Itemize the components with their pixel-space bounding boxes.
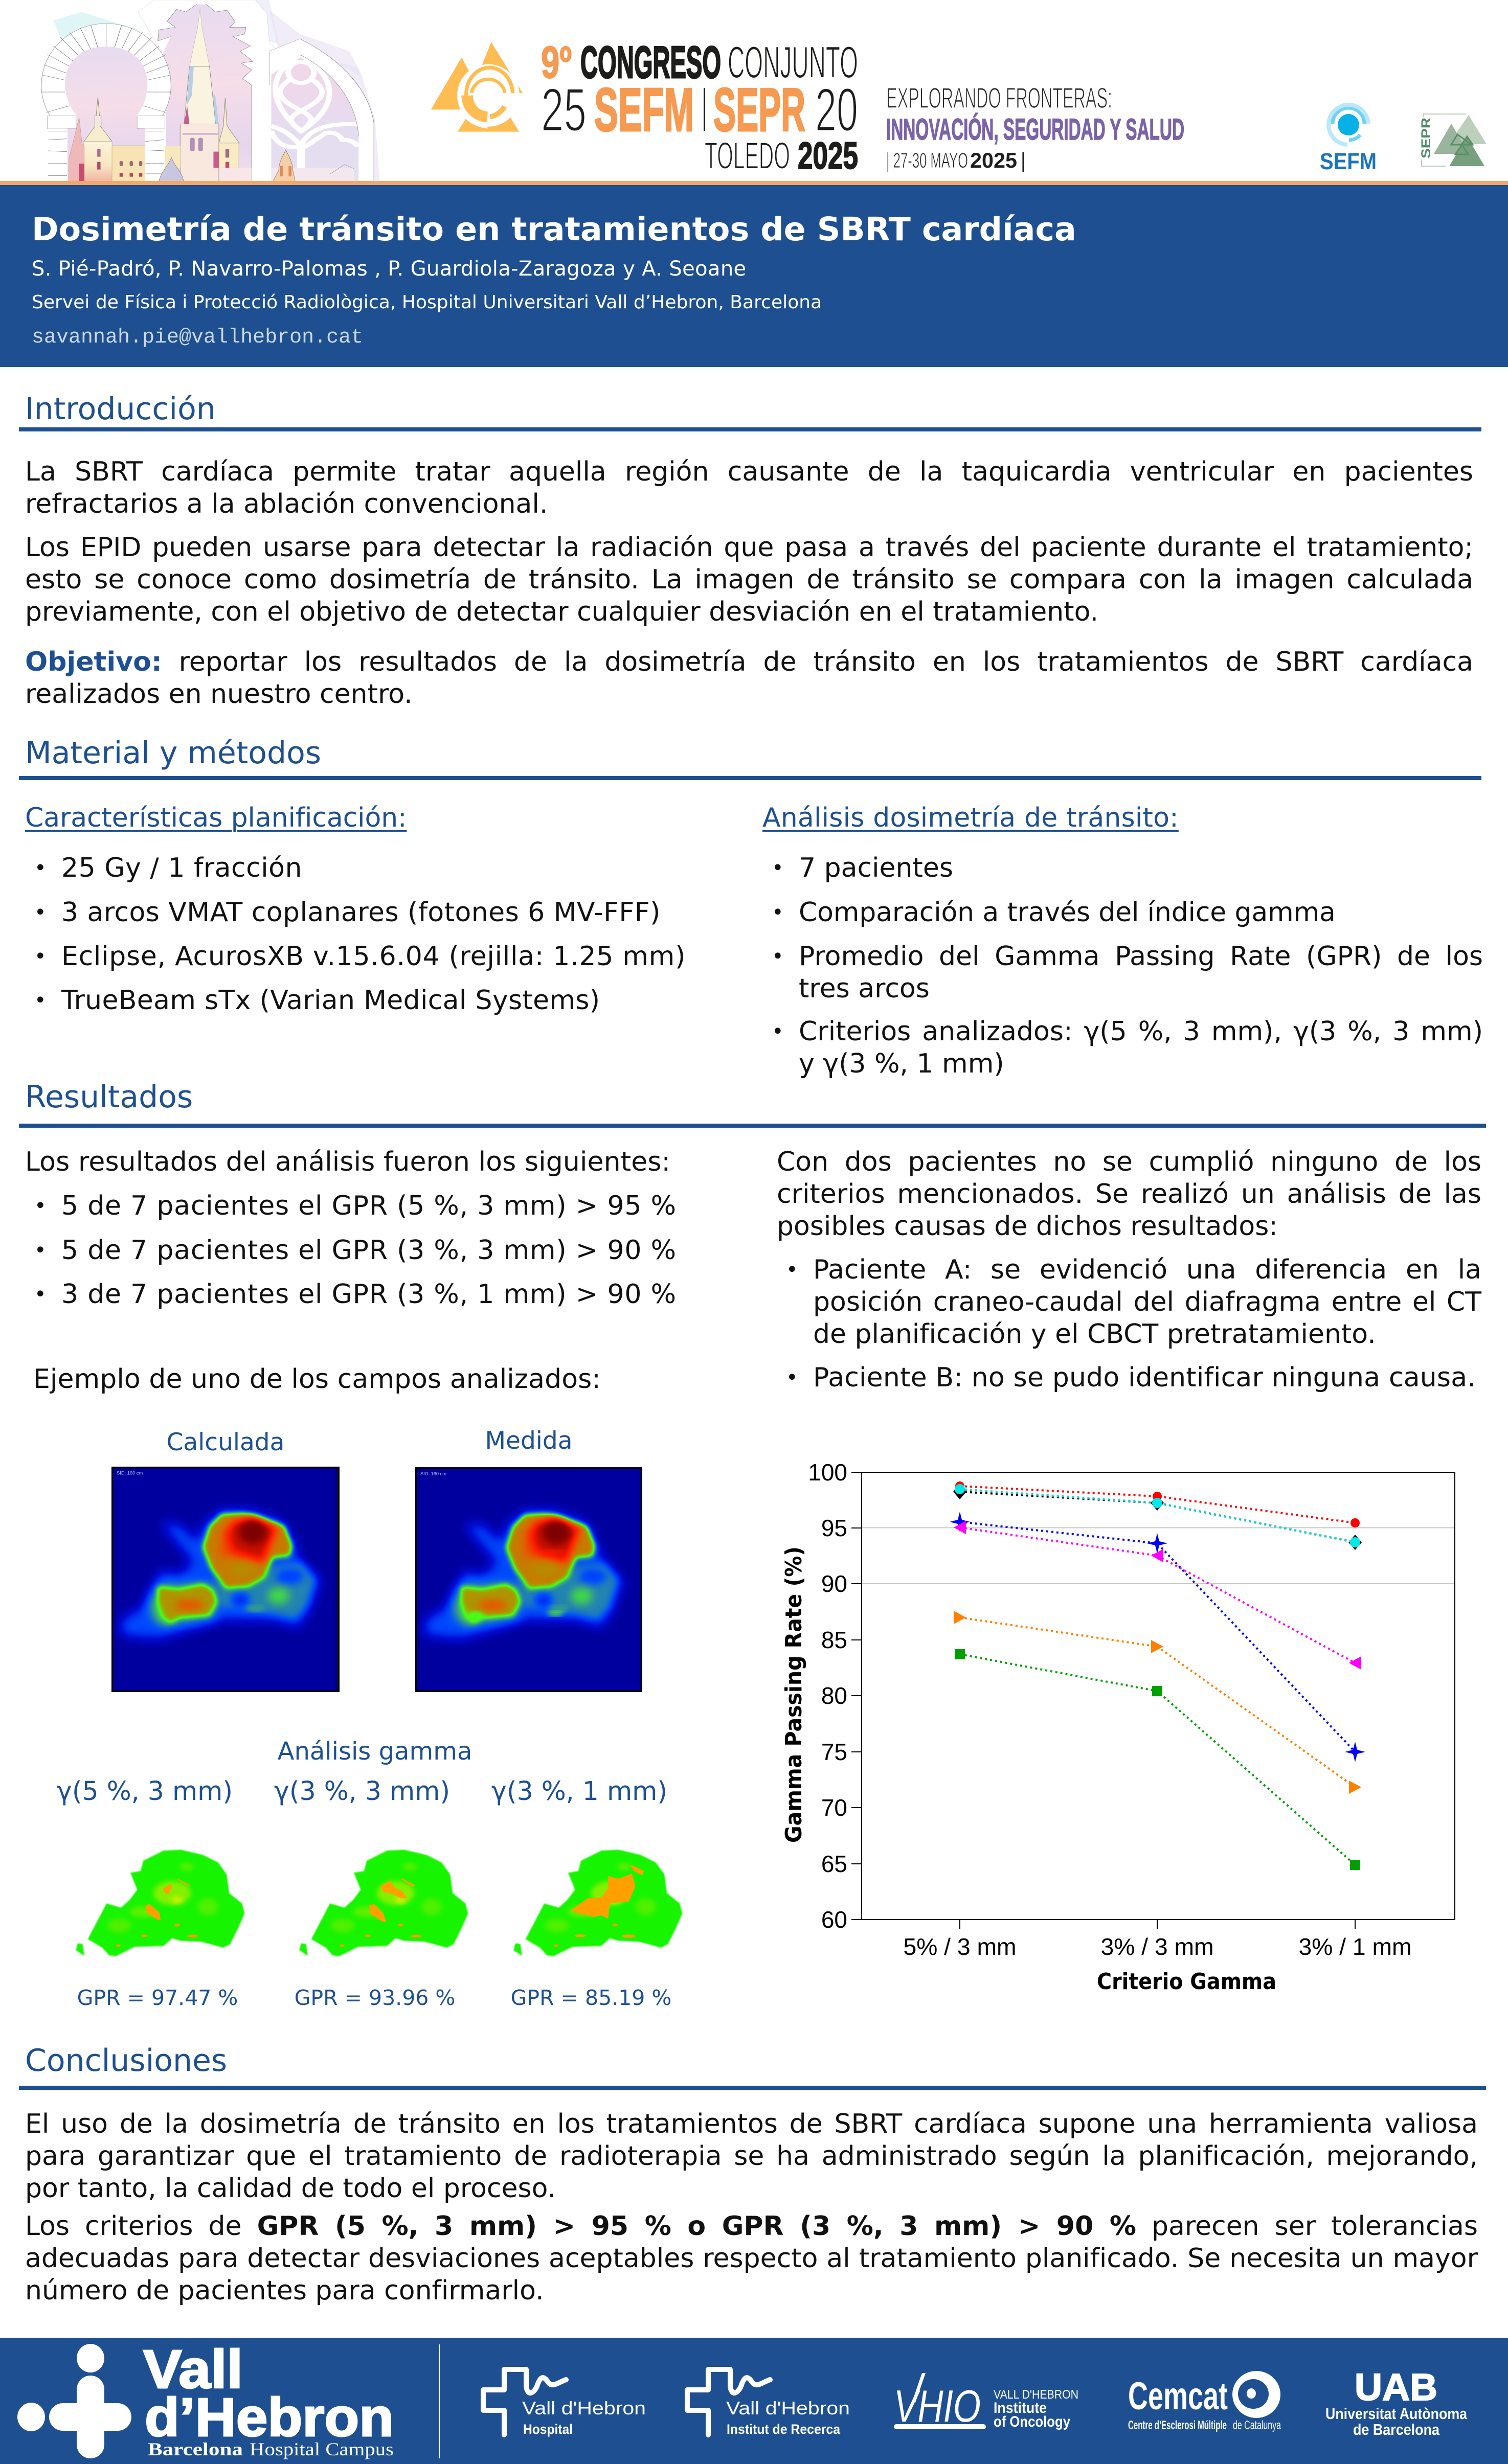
text: • xyxy=(772,1020,784,1043)
bullet list: características: 25 Gy / 1 fracción xyxy=(61,853,302,883)
bullet list: características xyxy=(34,853,686,1016)
logo: VHIO: VHIO xyxy=(894,2381,981,2431)
y axis ticks and labels: 75 xyxy=(821,1739,847,1765)
bullet list: análisis xyxy=(772,853,1483,1079)
bullet list: patient causes: Paciente B: no se pudo identificar ninguna causa. xyxy=(813,1362,1476,1393)
bullet list: análisis: y γ(3 %, 1 mm) xyxy=(799,1048,1004,1079)
paragraph: conclusion 2: adecuadas para detectar desviaciones aceptables respecto al tratamiento planificado. Se necesita un mayor xyxy=(25,2243,1478,2274)
contact email: savannah.pie@vallhebron.cat xyxy=(32,326,363,349)
logo: SEPR xyxy=(1419,113,1487,167)
paragraph: SBRT cardíaca: La SBRT cardíaca permite tratar aquella región causante de la taquicardia ventricular en pacientes xyxy=(25,457,1473,487)
congress title lockup: SEFM xyxy=(594,76,694,144)
series: blue star xyxy=(950,1512,1365,1762)
text: • xyxy=(772,901,783,924)
logo: UAB: UAB xyxy=(1355,2366,1437,2408)
congress title lockup: | 27-30 MAYO xyxy=(886,148,968,172)
y axis ticks and labels: 80 xyxy=(821,1682,847,1709)
text: • xyxy=(772,945,784,968)
y axis ticks and labels: 60 xyxy=(821,1906,847,1933)
x axis ticks and labels: 3% / 3 mm xyxy=(1100,1933,1214,1960)
text: • xyxy=(786,1366,798,1389)
poster title: Dosimetría de tránsito en tratamientos de SBRT cardíaca xyxy=(32,210,1076,248)
logo: Vall d'Hebron campus: d’Hebron xyxy=(145,2387,394,2448)
text: • xyxy=(34,856,47,880)
bullet list: patient causes: de planificación y el CBCT pretratamiento. xyxy=(813,1319,1376,1350)
paragraph: conclusion 2 xyxy=(25,2210,1478,2307)
congress title lockup xyxy=(541,37,1184,174)
paragraph: conclusion 2: número de pacientes para confirmarlo. xyxy=(25,2275,544,2306)
text: • xyxy=(34,901,47,924)
series: green square xyxy=(955,1649,1360,1870)
label: GPR 85.19: GPR = 85.19 % xyxy=(511,1986,671,2010)
logo: Vall d'Hebron Institut de Recerca: Institut de Recerca xyxy=(727,2422,841,2437)
logo: Vall d'Hebron Hospital xyxy=(483,2369,646,2437)
logo: Vall d'Hebron Hospital: Vall d'Hebron xyxy=(522,2398,646,2419)
paragraph: conclusion 1: El uso de la dosimetría de tránsito en los tratamientos de SBRT cardíaca supone una herramienta valiosa xyxy=(25,2109,1478,2139)
text: • xyxy=(772,856,784,880)
label: GPR 93.96: GPR = 93.96 % xyxy=(295,1986,455,2010)
bullet list: análisis: Promedio del Gamma Passing Rate (GPR) de los xyxy=(799,941,1483,972)
y axis ticks and labels: 70 xyxy=(821,1794,847,1821)
line chart: gamma passing rate xyxy=(767,1452,1478,2004)
paragraph: objetivo: Objetivo: reportar los resultados de la dosimetría de tránsito en los tratamientos de SBRT cardíaca xyxy=(25,647,1473,677)
x axis ticks and labels: 5% / 3 mm xyxy=(903,1933,1017,1960)
text: • xyxy=(34,945,47,968)
axis title: Criterio Gamma: Criterio Gamma xyxy=(1097,1969,1276,1995)
heat map: calculated dose xyxy=(111,1467,340,1692)
text: • xyxy=(34,1239,47,1262)
paragraph: EPID: esto se conoce como dosimetría de tránsito. La imagen de tránsito se compara con la imagen calculada xyxy=(25,564,1473,595)
label: γ(3 %, 1 mm): γ(3 %, 1 mm) xyxy=(491,1776,667,1806)
paragraph: conclusion 1: por tanto, la calidad de todo el proceso. xyxy=(25,2173,556,2204)
orange divider xyxy=(0,181,1508,185)
heat map: calculated dose: SID: 160 cm xyxy=(117,1471,143,1476)
logo: Vall d'Hebron campus: Vall xyxy=(143,2339,243,2400)
y axis ticks and labels: 90 xyxy=(821,1570,847,1597)
congress title lockup: CONGRESO xyxy=(580,37,721,87)
bullet list: análisis: Comparación a través del índice gamma xyxy=(799,897,1336,928)
section heading: Material y métodos: Material y métodos xyxy=(25,735,321,771)
logo: Cemcat: Centre d’Esclerosi Múltiple xyxy=(1128,2419,1227,2432)
label: Medida: Medida xyxy=(485,1427,573,1455)
logo: Vall d'Hebron campus: Barcelona xyxy=(148,2439,243,2459)
bullet list: patient causes: Paciente A: se evidenció una diferencia en la xyxy=(813,1254,1481,1285)
subheading: análisis dosimetría: Análisis dosimetría de tránsito: xyxy=(762,803,1179,833)
logo: Cemcat: de Catalunya xyxy=(1233,2419,1281,2432)
illustration: Toledo arches and towers xyxy=(41,0,379,181)
paragraph: conclusion 1 xyxy=(25,2108,1478,2205)
section heading: Introducción: Introducción xyxy=(25,391,216,427)
series: orange triangle xyxy=(954,1611,1361,1794)
subheading: características planificación: Características planificación: xyxy=(25,803,407,833)
gamma map 3 xyxy=(499,1830,714,1973)
paragraph: failing patients: posibles causas de dichos resultados: xyxy=(777,1211,1278,1242)
logo: Vall d'Hebron Institut de Recerca xyxy=(687,2369,850,2437)
logo: VHIO xyxy=(894,2373,1078,2431)
y axis ticks and labels: 95 xyxy=(821,1515,847,1541)
gamma map 1 xyxy=(61,1830,276,1973)
logo: SEFM xyxy=(1320,103,1377,171)
congress title lockup: 20 xyxy=(815,76,858,144)
heat map: measured dose xyxy=(415,1467,642,1692)
series: black xyxy=(953,1484,1362,1550)
congress title lockup: CONJUNTO xyxy=(728,37,858,87)
logo: Vall d'Hebron Institut de Recerca: Vall d'Hebron xyxy=(726,2398,850,2419)
logo: UAB: Universitat Autònoma xyxy=(1325,2405,1468,2423)
logo: Vall d'Hebron Hospital: Hospital xyxy=(523,2422,573,2437)
paragraph: failing patients xyxy=(777,1147,1481,1242)
bullet list: results: 3 de 7 pacientes el GPR (3 %, 1 mm) > 90 % xyxy=(61,1279,677,1310)
bullet list: results xyxy=(34,1191,677,1310)
y axis ticks and labels xyxy=(808,1459,862,1933)
text: • xyxy=(34,1194,47,1218)
y axis ticks and labels: 100 xyxy=(808,1459,847,1486)
paragraph: failing patients: Con dos pacientes no se cumplió ninguno de los xyxy=(777,1147,1481,1177)
label: Análisis gamma: Análisis gamma xyxy=(278,1737,472,1766)
logo: UAB xyxy=(1325,2366,1468,2438)
paragraph: conclusion 2: Los criterios de GPR (5 %, 3 mm) > 95 % o GPR (3 %, 3 mm) > 90 % parecen ser tolerancias xyxy=(25,2211,1478,2242)
series: magenta triangle xyxy=(954,1521,1361,1670)
y axis ticks and labels: 65 xyxy=(821,1851,847,1877)
bullet list: análisis: tres arcos xyxy=(799,973,930,1004)
gamma map 2 xyxy=(285,1830,500,1973)
affiliation: Servei de Física i Protecció Radiològica, Hospital Universitari Vall d’Hebron, Barcelona xyxy=(32,292,822,313)
header band with congress artwork xyxy=(0,0,1508,185)
authors: S. Pié-Padró, P. Navarro-Palomas , P. Guardiola-Zaragoza y A. Seoane xyxy=(32,257,747,281)
bullet list: características: TrueBeam sTx (Varian Medical Systems) xyxy=(61,985,600,1016)
paragraph: objetivo xyxy=(25,647,1473,710)
label: γ(5 %, 3 mm): γ(5 %, 3 mm) xyxy=(57,1776,233,1806)
congress title lockup: 25 xyxy=(541,76,587,144)
x axis ticks and labels xyxy=(903,1920,1411,1960)
congress title lockup: | xyxy=(1021,148,1026,172)
results intro sentence: Los resultados del análisis fueron los siguientes: xyxy=(25,1147,670,1177)
text: • xyxy=(34,1283,47,1306)
bullet list: análisis: 7 pacientes xyxy=(799,853,953,883)
bullet list: patient causes xyxy=(813,1254,1481,1407)
paragraph: SBRT cardíaca: refractarios a la ablación convencional. xyxy=(25,489,548,519)
label: Calculada: Calculada xyxy=(167,1428,284,1456)
label: GPR 97.47: GPR = 97.47 % xyxy=(77,1986,238,2010)
bullet list: análisis: Criterios analizados: γ(5 %, 3 mm), γ(3 %, 3 mm) xyxy=(799,1016,1483,1047)
logo: UAB: de Barcelona xyxy=(1353,2421,1440,2438)
congress title lockup: 2025 xyxy=(970,148,1017,172)
text: • xyxy=(34,989,47,1012)
series: red xyxy=(955,1481,1360,1527)
paragraph: EPID: previamente, con el objetivo de detectar cualquier desviación en el tratamiento. xyxy=(25,597,1098,627)
x axis ticks and labels: 3% / 1 mm xyxy=(1299,1933,1411,1960)
axis title: Gamma Passing Rate: Gamma Passing Rate (%) xyxy=(781,1546,807,1843)
paragraph: failing patients: criterios mencionados. Se realizó un análisis de las xyxy=(777,1179,1481,1210)
label: γ(3 %, 3 mm): γ(3 %, 3 mm) xyxy=(274,1776,450,1806)
logo: VHIO: VALL D'HEBRON xyxy=(994,2388,1078,2402)
paragraph: EPID xyxy=(25,532,1473,627)
logo: Vall d'Hebron campus: Hospital Campus xyxy=(250,2439,394,2459)
series: cyan xyxy=(955,1484,1360,1547)
paragraph: SBRT cardíaca xyxy=(25,457,1473,519)
paragraph: EPID: Los EPID pueden usarse para detectar la radiación que pasa a través del paciente durante el tratamiento; xyxy=(25,532,1473,563)
bullet list: patient causes: posición craneo-caudal del diafragma entre el CT xyxy=(813,1287,1481,1317)
paragraph: objetivo: realizados en nuestro centro. xyxy=(25,679,413,710)
congress emblem: triangles and concentric arcs xyxy=(431,42,523,132)
paragraph: conclusion 1: para garantizar que el tratamiento de radioterapia se ha administrado según la planificación, mejorando, xyxy=(25,2141,1478,2172)
logo: SEPR: SEPR xyxy=(1419,118,1433,158)
congress title lockup: 9º xyxy=(541,37,572,87)
title banner xyxy=(0,185,1508,367)
bullet list: características: 3 arcos VMAT coplanares (fotones 6 MV-FFF) xyxy=(61,897,661,928)
logo: Vall d'Hebron campus xyxy=(17,2339,394,2459)
logo: Cemcat xyxy=(1128,2371,1281,2432)
footer band with institutional logos xyxy=(0,2338,1508,2464)
logo: VHIO: Institute xyxy=(994,2400,1047,2416)
bullet list: results: 5 de 7 pacientes el GPR (3 %, 3 mm) > 90 % xyxy=(61,1235,677,1266)
example caption: Ejemplo de uno de los campos analizados: xyxy=(33,1364,601,1395)
logo: VHIO: of Oncology xyxy=(994,2413,1070,2430)
y axis ticks and labels: 85 xyxy=(821,1627,847,1653)
congress title lockup: SEPR xyxy=(713,76,805,144)
section heading: Resultados: Resultados xyxy=(25,1079,193,1115)
logo: Cemcat: Cemcat xyxy=(1128,2375,1228,2418)
bullet list: características: Eclipse, AcurosXB v.15.6.04 (rejilla: 1.25 mm) xyxy=(61,941,686,972)
text: • xyxy=(786,1258,798,1282)
bullet list: results: 5 de 7 pacientes el GPR (5 %, 3 mm) > 95 % xyxy=(61,1191,677,1221)
section heading: Conclusiones: Conclusiones xyxy=(25,2043,227,2079)
heat map: measured dose: SID: 160 cm xyxy=(420,1471,446,1476)
